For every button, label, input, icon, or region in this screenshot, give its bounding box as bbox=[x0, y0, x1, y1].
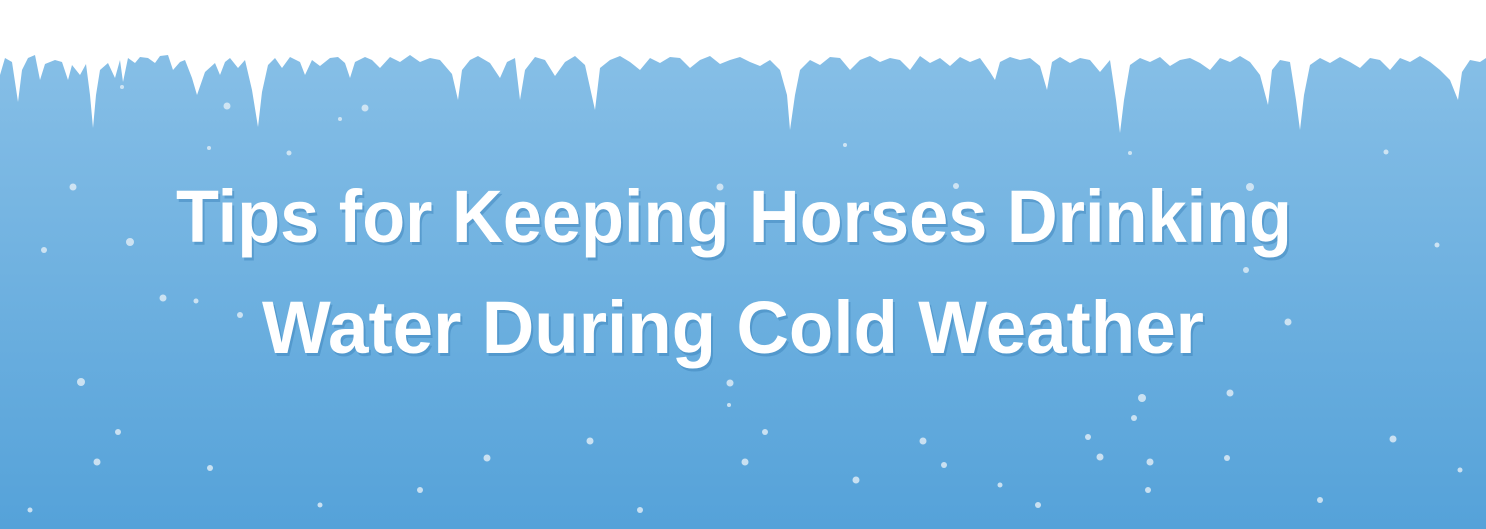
icicles bbox=[0, 0, 1486, 133]
title bbox=[176, 175, 1294, 372]
snowflakes bbox=[28, 85, 1462, 513]
title line 2: Water During Cold Weather bbox=[264, 289, 1206, 372]
title: Tips for Keeping Horses Drinking bbox=[176, 175, 1292, 258]
title line 1: Tips for Keeping Horses Drinking bbox=[178, 178, 1294, 261]
title: Water During Cold Weather bbox=[262, 286, 1204, 369]
